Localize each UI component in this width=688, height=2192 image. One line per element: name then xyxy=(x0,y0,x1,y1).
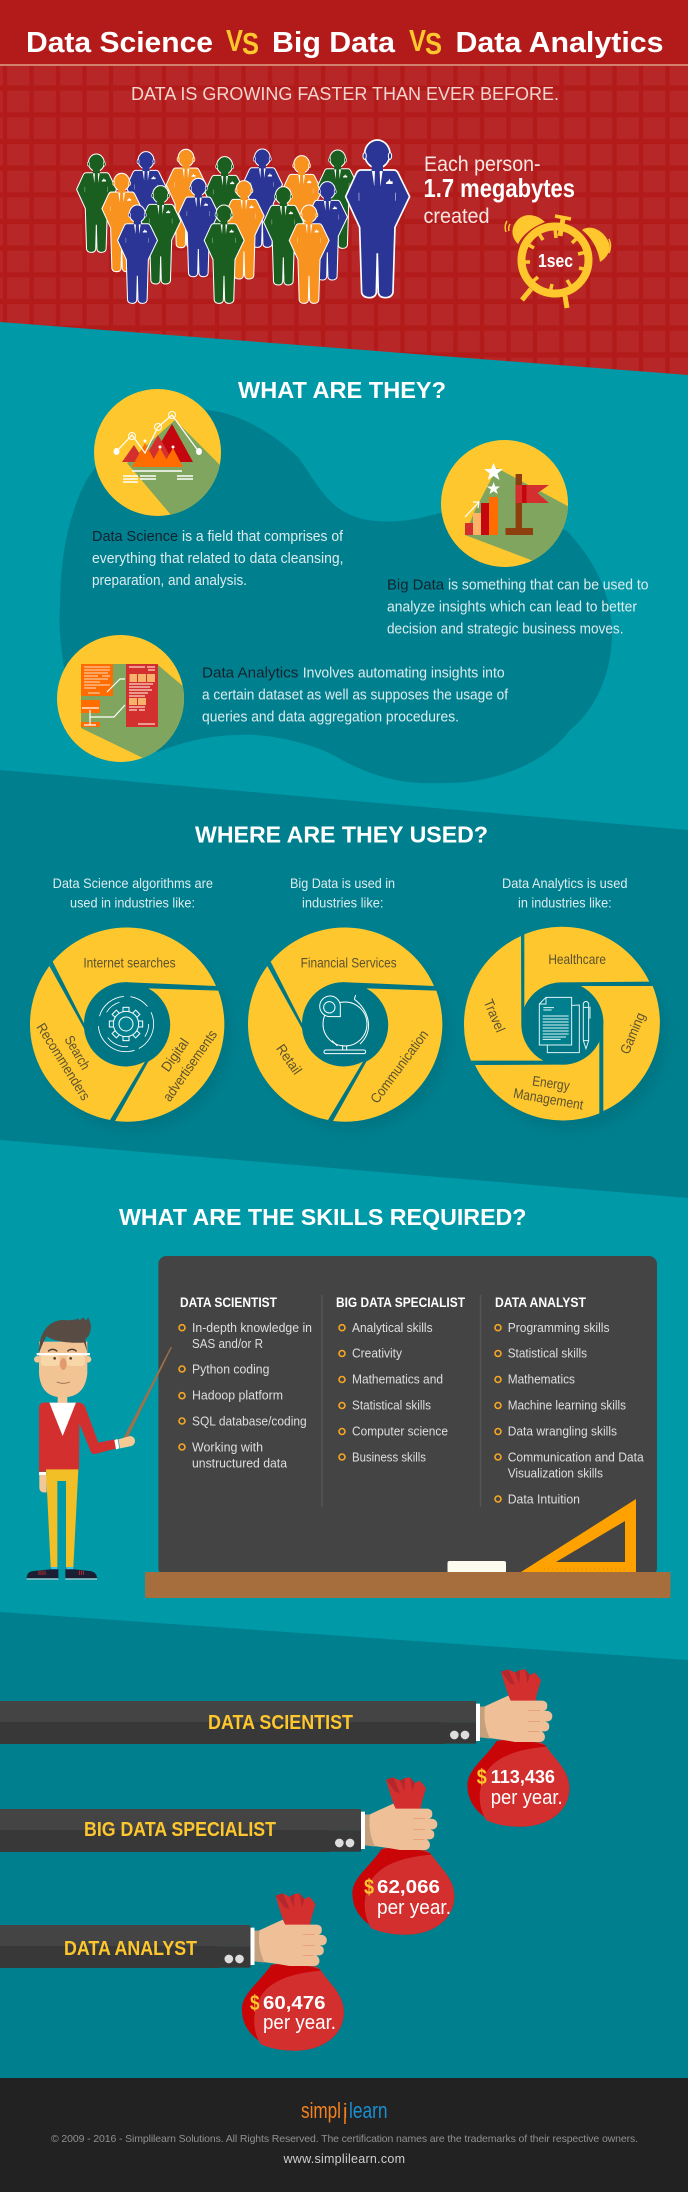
logo: learn xyxy=(349,2098,388,2123)
salary row: big data specialist xyxy=(0,1777,454,1935)
megabytes text block xyxy=(424,153,575,228)
column: data scientist skills: In-depth knowledge in xyxy=(192,1320,312,1335)
dark teal blob behind the definitions xyxy=(59,410,612,783)
definition text: queries and data aggregation procedures. xyxy=(202,709,459,725)
column: data scientist skills xyxy=(179,1294,312,1471)
icon: alarm clock: 1sec xyxy=(538,251,573,271)
intro text: data analytics usage: Data Analytics is used xyxy=(502,875,628,891)
heading: skills required: WHAT ARE THE SKILLS REQUIRED? xyxy=(119,1204,526,1230)
salary amount xyxy=(250,1992,336,2034)
salary amount xyxy=(364,1876,451,1919)
icon: globe with pin xyxy=(320,995,369,1054)
definition text: everything that related to data cleansing, xyxy=(92,551,344,567)
icon: documents in yellow circle xyxy=(57,635,184,762)
salary amount: per year. xyxy=(263,2012,336,2034)
icon: bars and flag in yellow circle xyxy=(441,440,575,570)
dark teal section: where are they used xyxy=(0,770,688,1200)
title: Data Science xyxy=(26,27,213,59)
title xyxy=(26,23,664,61)
wheel: big data industries xyxy=(248,927,450,1132)
intro text: data science usage xyxy=(53,875,213,911)
icon: hand holding money bag xyxy=(440,1669,569,1827)
set square ruler xyxy=(521,1499,636,1572)
wheel: data analytics industries: Gaming xyxy=(617,1010,648,1056)
wheel: big data industries: Communication xyxy=(367,1027,431,1106)
column: data scientist skills: SQL database/coding xyxy=(192,1414,307,1428)
panel: data analytics definition xyxy=(57,635,509,770)
intro text: data analytics usage: in industries like: xyxy=(518,895,612,911)
wheel: data science industries: Search xyxy=(62,1033,94,1072)
salary amount: 113,436 xyxy=(491,1766,555,1787)
column: data scientist skills: Hadoop platform xyxy=(192,1388,283,1402)
title: V xyxy=(226,23,243,58)
wheel: data science industries xyxy=(30,927,232,1132)
column: data analyst skills: Data wrangling skills xyxy=(508,1424,617,1439)
column: data scientist skills: unstructured data xyxy=(192,1456,288,1471)
teal section: what are they xyxy=(0,322,688,835)
definition text: decision and strategic business moves. xyxy=(387,622,624,638)
job title: BIG DATA SPECIALIST xyxy=(84,1819,276,1841)
column: big data specialist skills xyxy=(336,1294,465,1465)
salary amount: per year. xyxy=(377,1897,451,1919)
website: www.simplilearn.com xyxy=(282,2152,405,2166)
column: big data specialist skills: Creativity xyxy=(352,1346,402,1361)
column: big data specialist skills: BIG DATA SPECIALIST xyxy=(336,1294,465,1310)
heading: what are they: WHAT ARE THEY? xyxy=(238,377,446,403)
salary amount xyxy=(477,1766,563,1809)
salary amount: $ xyxy=(477,1766,487,1789)
intro text: data science usage: used in industries like: xyxy=(70,895,195,911)
definition text xyxy=(202,665,509,725)
eraser xyxy=(448,1561,506,1573)
wheel: big data industries: Retail xyxy=(273,1041,305,1077)
title: Data Analytics xyxy=(456,27,664,59)
column: data scientist skills: SAS and/or R xyxy=(192,1336,263,1351)
icon: hand holding money bag xyxy=(214,1893,344,2051)
salary amount: $ xyxy=(250,1992,260,2015)
wheel: data analytics industries: Energy xyxy=(531,1072,571,1094)
header bar xyxy=(0,0,688,66)
intro text: big data usage: Big Data is used in xyxy=(290,875,395,891)
title: S xyxy=(242,26,259,61)
teacher character xyxy=(27,1317,172,1579)
column: data analyst skills: Data Intuition xyxy=(508,1492,580,1507)
icon: gear xyxy=(98,996,154,1052)
salary amount: 62,066 xyxy=(377,1876,440,1897)
wheel: data analytics industries: Healthcare xyxy=(548,951,606,967)
wheel: data analytics industries: Travel xyxy=(481,997,509,1034)
intro text: big data usage: industries like: xyxy=(302,895,384,911)
icon: documents and pen xyxy=(539,997,590,1053)
panel: chalkboard xyxy=(145,1256,670,1598)
definition text: Data Analytics xyxy=(202,665,298,681)
title: Big Data xyxy=(272,27,396,59)
column: big data specialist skills: Analytical skills xyxy=(352,1320,433,1335)
intro text: big data usage xyxy=(290,875,395,911)
icon: mountains chart in yellow circle xyxy=(94,389,225,520)
definition text: a certain dataset as well as supposes the usage of xyxy=(202,687,509,703)
wheel: data analytics industries xyxy=(464,927,667,1132)
column: data analyst skills: Statistical skills xyxy=(508,1346,587,1361)
crowd of people xyxy=(77,140,410,303)
definition text: Data Science xyxy=(92,529,178,545)
copyright: © 2009 - 2016 - Simplilearn Solutions. All Rights Reserved. The certification names are the trademarks of their respective owners. xyxy=(51,2133,638,2145)
salary amount: $ xyxy=(364,1876,374,1899)
logo: i xyxy=(343,2101,347,2123)
logo: simpl xyxy=(301,2098,341,2123)
icon: hand holding money bag xyxy=(325,1777,454,1935)
column: big data specialist skills: Computer science xyxy=(352,1424,448,1439)
wheel: data science industries: Digital xyxy=(158,1035,192,1075)
red grid pattern xyxy=(0,66,688,380)
panel: big data definition xyxy=(387,440,648,638)
megabytes text block: created xyxy=(424,205,490,228)
column: data scientist skills: Python coding xyxy=(192,1362,269,1377)
definition text: Big Data xyxy=(387,578,445,594)
column: data scientist skills: DATA SCIENTIST xyxy=(180,1294,277,1310)
definition text xyxy=(387,578,648,638)
title: V xyxy=(409,23,426,58)
column: big data specialist skills: Mathematics and xyxy=(352,1372,443,1387)
definition text: Involves automating insights into xyxy=(303,665,505,681)
wheel: data analytics industries: Management xyxy=(512,1085,585,1113)
wheel: data science industries: advertisements xyxy=(159,1027,220,1104)
column: data analyst skills: Mathematics xyxy=(508,1372,575,1387)
definition text: preparation, and analysis. xyxy=(92,573,247,589)
salary row: data analyst xyxy=(0,1893,344,2051)
definition text: is something that can be used to xyxy=(448,578,648,594)
wheel: data science industries: Recommenders xyxy=(34,1020,94,1103)
dark teal section: salaries xyxy=(0,1612,688,2080)
logo xyxy=(301,2098,388,2124)
column: data analyst skills: Machine learning skills xyxy=(508,1398,626,1413)
column: data analyst skills: Communication and Data xyxy=(508,1450,644,1465)
megabytes text block: 1.7 megabytes xyxy=(424,173,575,203)
column: data analyst skills: Programming skills xyxy=(508,1320,610,1335)
column: data analyst skills xyxy=(495,1294,644,1507)
intro text: data science usage: Data Science algorithms are xyxy=(53,875,213,891)
megabytes text block: Each person- xyxy=(424,153,541,176)
subtitle: DATA IS GROWING FASTER THAN EVER BEFORE. xyxy=(131,84,559,104)
column: data scientist skills: Working with xyxy=(192,1440,263,1455)
footer xyxy=(0,2078,688,2192)
column: big data specialist skills: Statistical skills xyxy=(352,1398,431,1413)
definition text: analyze insights which can lead to better xyxy=(387,600,637,616)
salary amount: per year. xyxy=(491,1787,563,1809)
teal section: skills xyxy=(0,1140,688,1665)
definition text xyxy=(92,529,344,589)
red background panel xyxy=(0,0,688,380)
icon: alarm clock xyxy=(505,215,610,308)
title: S xyxy=(425,26,442,61)
intro text: data analytics usage xyxy=(502,875,628,911)
wheel: big data industries: Financial Services xyxy=(301,954,397,970)
panel: data science definition xyxy=(92,389,344,589)
column: data analyst skills: Visualization skills xyxy=(508,1466,603,1481)
salary row: data scientist xyxy=(0,1669,569,1827)
job title: DATA ANALYST xyxy=(64,1938,197,1960)
wheel: data science industries: Internet searches xyxy=(83,954,176,970)
column: big data specialist skills: Business skills xyxy=(352,1450,426,1465)
column: data analyst skills: DATA ANALYST xyxy=(495,1294,586,1310)
definition text: is a field that comprises of xyxy=(182,529,344,545)
heading: where are they used: WHERE ARE THEY USED? xyxy=(195,821,488,847)
chalk shelf xyxy=(145,1572,670,1598)
salary amount: 60,476 xyxy=(263,1992,326,2013)
job title: DATA SCIENTIST xyxy=(208,1712,353,1734)
